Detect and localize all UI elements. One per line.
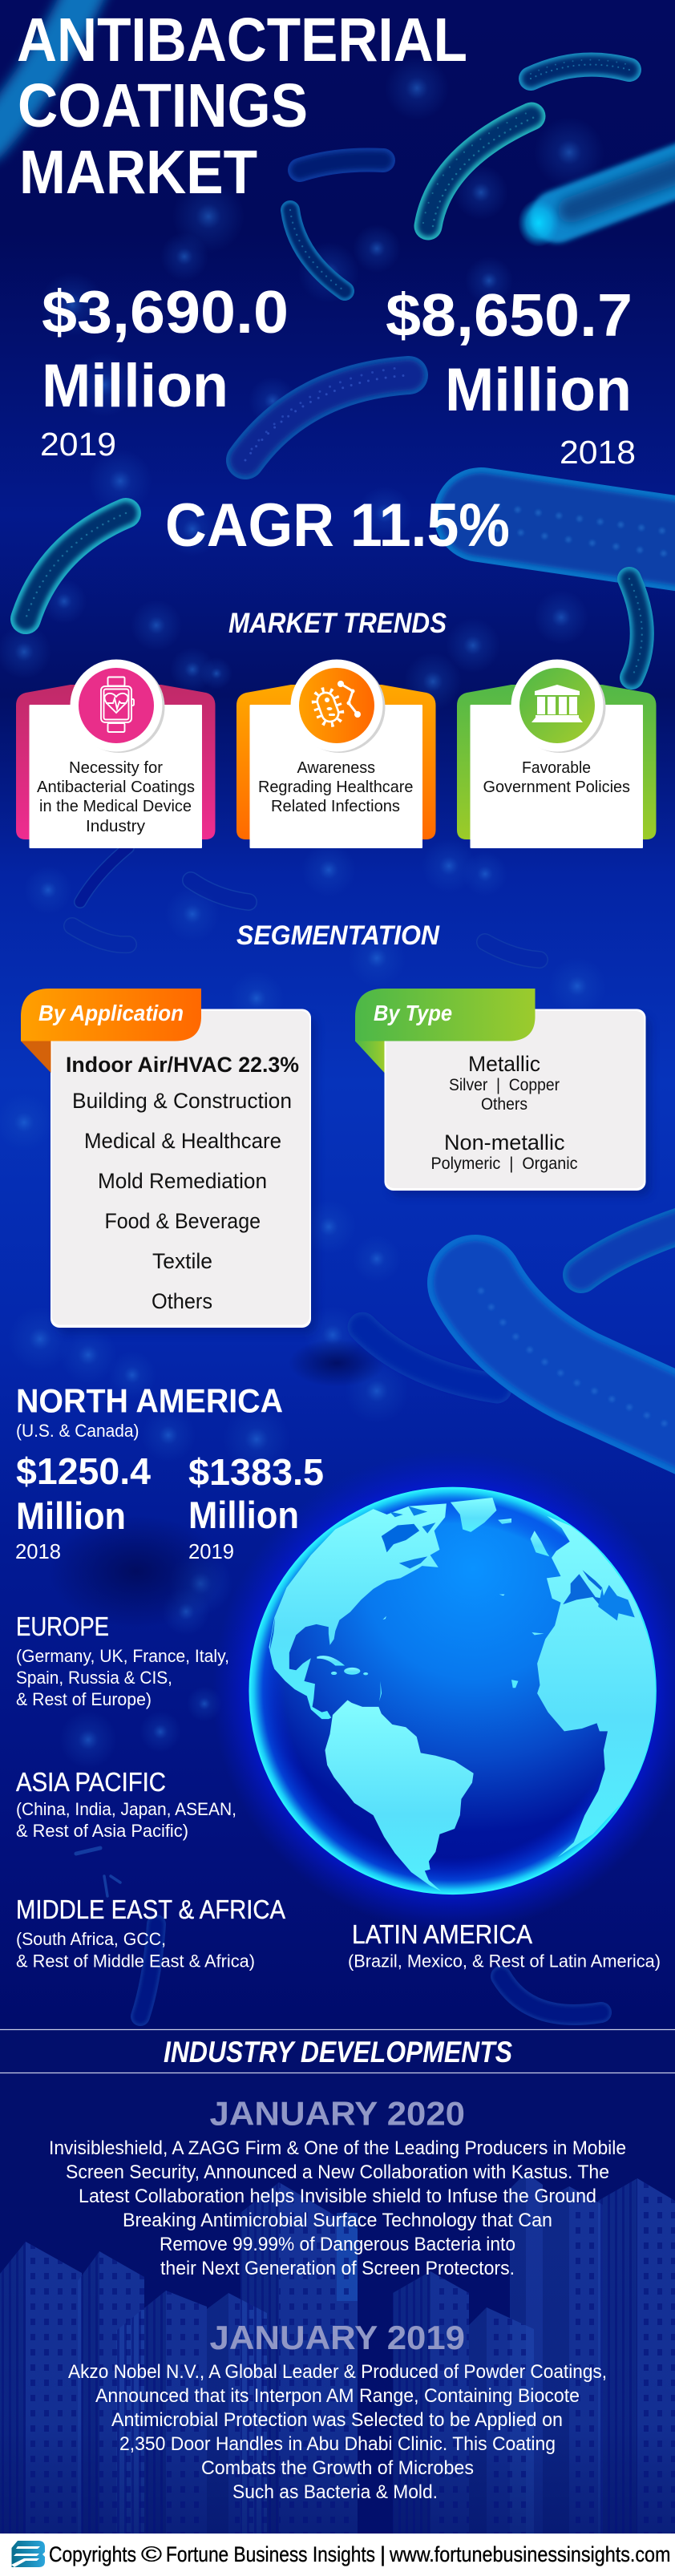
- region: north america: 2018: [15, 1539, 61, 1563]
- development: january 2019: Combats the Growth of Microbes: [201, 2457, 474, 2479]
- development: january 2020: Invisibleshield, A ZAGG Firm & One of the Leading Producers in Mobile: [49, 2137, 626, 2159]
- stat: 2018 market value: 2018: [560, 434, 636, 471]
- panel: by application: Building & Construction: [72, 1089, 292, 1113]
- stat: 2019 market value: $3,690.0: [42, 278, 289, 346]
- icon: fortune business insights logo: [11, 2541, 45, 2567]
- region: middle east and africa: [16, 1895, 285, 1971]
- region: latin america: (Brazil, Mexico, & Rest of Latin America): [348, 1951, 661, 1971]
- panel: by type: Silver | Copper: [449, 1076, 560, 1094]
- region: asia pacific: (China, India, Japan, ASEAN,: [16, 1799, 236, 1819]
- region: asia pacific: [16, 1767, 236, 1841]
- region: north america: [15, 1382, 324, 1563]
- title: ANTIBACTERIAL: [17, 6, 467, 75]
- city skyline: [0, 2173, 675, 2534]
- panel: by application: Indoor Air/HVAC 22.3%: [66, 1053, 299, 1077]
- panel: by application: [21, 989, 317, 1333]
- footer: Fortune Business Insights: [166, 2542, 375, 2566]
- panel: trend government policies: Favorable: [522, 759, 591, 777]
- footer: [0, 2534, 675, 2576]
- development: january 2020: Screen Security, Announced a New Collaboration with Kastus. The: [66, 2161, 609, 2183]
- panel: trend healthcare infections: Awareness: [297, 759, 375, 777]
- development: january 2020: Breaking Antimicrobial Surface Technology that Can: [123, 2210, 552, 2231]
- stat: 2018 market value: $8,650.7: [386, 281, 633, 349]
- globe: [212, 1450, 675, 1931]
- stat: 2018 market value: [386, 281, 636, 471]
- development: january 2019: Akzo Nobel N.V., A Global Leader & Produced of Powder Coatings,: [68, 2361, 607, 2383]
- panel: trend medical device: in the Medical Device: [39, 798, 192, 815]
- panel: industry developments background: [0, 2029, 675, 2534]
- panel: trend healthcare infections: Regrading Healthcare: [258, 778, 414, 796]
- heading: industry developments: INDUSTRY DEVELOPMENTS: [164, 2036, 512, 2068]
- region: north america: $1383.5: [188, 1451, 324, 1493]
- stat: 2019 market value: [40, 278, 289, 463]
- stat: CAGR: CAGR 11.5%: [165, 491, 510, 560]
- icon: bacterium: [313, 681, 361, 726]
- tab: by application: By Application: [38, 1001, 184, 1025]
- region: north america: (U.S. & Canada): [16, 1421, 139, 1441]
- panel: by application: Others: [152, 1289, 212, 1313]
- region: north america: 2019: [188, 1539, 234, 1563]
- region: middle east and africa: MIDDLE EAST & AFRICA: [16, 1895, 285, 1924]
- region: north america: Million: [188, 1494, 299, 1536]
- development: january 2020: JANUARY 2020: [210, 2094, 465, 2133]
- divider lines: [0, 2030, 675, 2073]
- region: north america: Million: [16, 1494, 126, 1537]
- region: europe: & Rest of Europe): [16, 1689, 152, 1709]
- panel: by type: Metallic: [468, 1052, 540, 1076]
- development: january 2020: Latest Collaboration helps Invisible shield to Infuse the Ground: [79, 2186, 596, 2207]
- development: january 2020: their Next Generation of Screen Protectors.: [160, 2258, 515, 2279]
- panel: by application: Medical & Healthcare: [84, 1129, 281, 1153]
- back towers: left faces then right faces: [240, 2173, 637, 2534]
- panel: by application: Food & Beverage: [104, 1209, 261, 1233]
- panel: by type: Others: [481, 1095, 527, 1114]
- heading: segmentation: SEGMENTATION: [236, 920, 440, 951]
- region: asia pacific: ASIA PACIFIC: [16, 1767, 166, 1797]
- region: latin america: [348, 1919, 661, 1971]
- panel: trend government policies: [457, 659, 656, 848]
- footer: |: [380, 2542, 386, 2566]
- panel: trend medical device: Antibacterial Coatings: [37, 778, 195, 796]
- tab: by application: [21, 989, 201, 1041]
- panel: trend healthcare infections: [236, 659, 436, 848]
- development: january 2019: Announced that its Interpon AM Range, Containing Biocote: [95, 2385, 580, 2407]
- region: europe: [16, 1612, 229, 1709]
- development: january 2019: 2,350 Door Handles in Abu Dhabi Clinic. This Coating: [119, 2433, 556, 2455]
- panel: trend medical device: Necessity for: [69, 759, 163, 777]
- panel: trend medical device: [16, 659, 215, 848]
- panel: trend medical device: Industry: [86, 818, 145, 835]
- development: january 2020: [49, 2094, 626, 2279]
- region: europe: EUROPE: [16, 1612, 109, 1641]
- region: middle east and africa: & Rest of Middle East & Africa): [16, 1951, 255, 1971]
- panel: by type: Polymeric | Organic: [431, 1155, 577, 1173]
- development: january 2019: Such as Bacteria & Mold.: [232, 2481, 438, 2503]
- region: latin america: LATIN AMERICA: [352, 1919, 532, 1949]
- background bokeh particles: [0, 56, 606, 1769]
- title: [17, 6, 467, 207]
- development: january 2020: Remove 99.99% of Dangerous Bacteria into: [160, 2234, 515, 2255]
- region: north america: NORTH AMERICA: [16, 1382, 283, 1419]
- development: january 2019: JANUARY 2019: [210, 2319, 465, 2356]
- panel: by application: Textile: [152, 1249, 212, 1273]
- stat: 2018 market value: Million: [445, 356, 632, 424]
- icon: government building: [532, 685, 583, 722]
- icon: smartwatch heart: [101, 677, 134, 732]
- footer: Copyrights: [49, 2542, 136, 2566]
- tab: by type: By Type: [374, 1001, 452, 1025]
- panel: by type: Non-metallic: [444, 1130, 564, 1155]
- development: january 2019: Antimicrobial Protection was Selected to be Applied on: [111, 2409, 563, 2431]
- footer: ©: [141, 2542, 162, 2566]
- stat: 2019 market value: Million: [42, 352, 228, 420]
- region: north america: $1250.4: [16, 1450, 151, 1492]
- panel: trend government policies: Government Policies: [483, 778, 630, 796]
- panel: by type: [355, 989, 651, 1196]
- tab: by type: [355, 989, 536, 1041]
- stat: 2019 market value: 2019: [40, 426, 116, 463]
- title: COATINGS: [18, 71, 308, 140]
- heading: market trends: MARKET TRENDS: [228, 608, 447, 639]
- region: europe: Spain, Russia & CIS,: [16, 1668, 172, 1688]
- title: MARKET: [19, 138, 257, 207]
- region: middle east and africa: (South Africa, GCC,: [16, 1929, 166, 1949]
- region: asia pacific: & Rest of Asia Pacific): [16, 1821, 188, 1841]
- development: january 2019: [68, 2319, 607, 2503]
- region: europe: (Germany, UK, France, Italy,: [16, 1646, 229, 1666]
- panel: by application: Mold Remediation: [98, 1169, 267, 1193]
- panel: trend healthcare infections: Related Infections: [271, 798, 400, 815]
- bacteria illustrations: [0, 0, 675, 2016]
